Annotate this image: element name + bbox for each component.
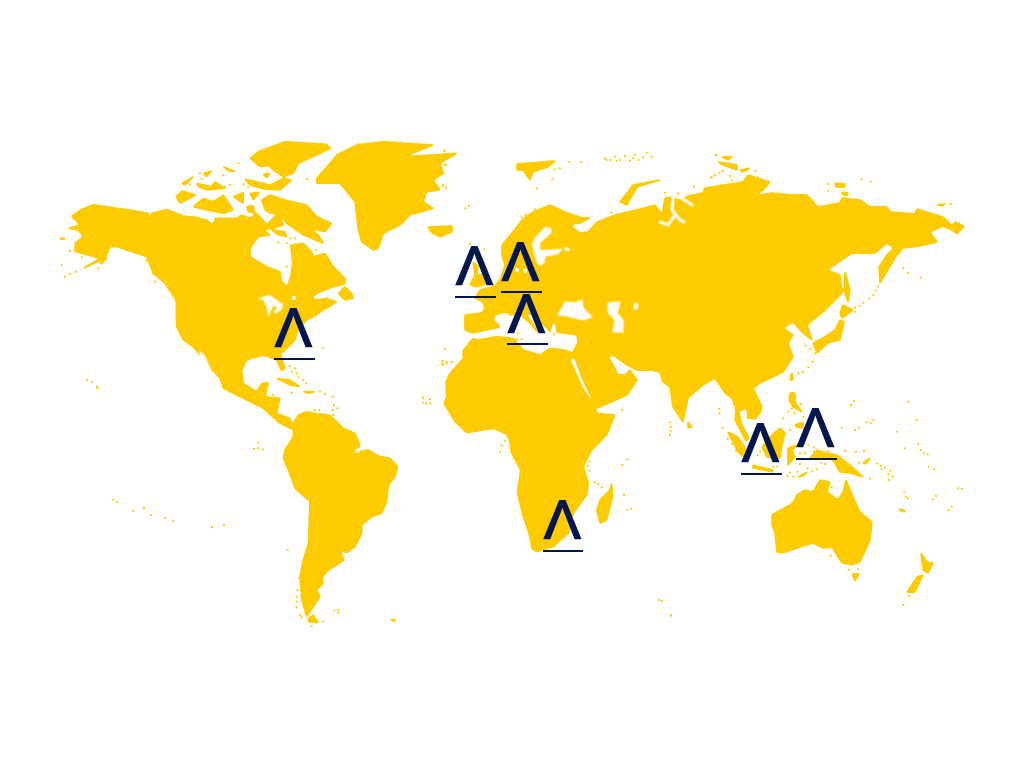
white spots on land	[292, 256, 546, 300]
marker: Northern Europe: Λ	[502, 230, 539, 292]
Baltic Sea	[532, 227, 563, 266]
marker: United Kingdom: Λ	[456, 234, 493, 296]
North America and Greenland	[59, 142, 457, 429]
South America	[283, 412, 398, 623]
marker: Southeast Asia: Λ	[742, 412, 779, 474]
Africa and Madagascar	[444, 337, 615, 552]
world map	[59, 142, 964, 626]
marker: North America: Λ	[275, 296, 312, 358]
Arctic Russian islands	[718, 157, 945, 206]
Svalbard	[517, 161, 555, 180]
marker: Indonesia East: Λ	[797, 396, 834, 458]
small islands	[62, 144, 962, 626]
Iceland	[428, 226, 452, 237]
New Zealand	[907, 553, 933, 592]
landmasses	[59, 142, 964, 623]
Tasmania	[852, 574, 859, 581]
Great Britain	[470, 262, 489, 287]
Novaya Zemlya	[620, 180, 660, 205]
Canadian Arctic islands	[176, 142, 332, 243]
Australia	[772, 480, 872, 565]
marker: Southern Europe: Λ	[508, 282, 545, 344]
Japan and Sakhalin	[813, 272, 853, 353]
marker: South Africa: Λ	[544, 488, 581, 550]
Southeast Asian islands	[688, 373, 905, 512]
Eurasia	[465, 175, 964, 441]
